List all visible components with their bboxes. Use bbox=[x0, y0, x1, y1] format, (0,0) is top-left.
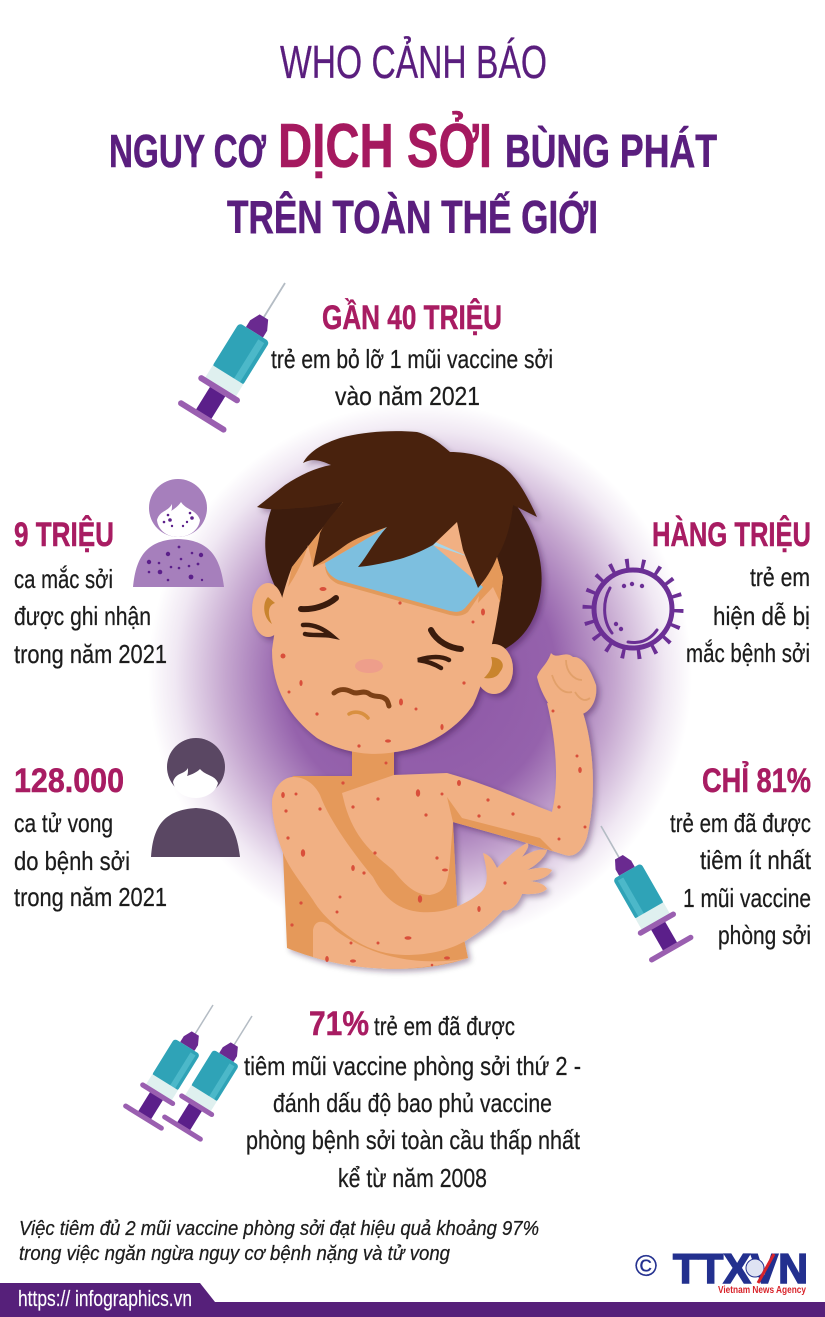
chin bbox=[349, 712, 368, 718]
stat: 128.000: trong năm 2021 bbox=[14, 882, 167, 912]
logo: TTXVN: © bbox=[635, 1250, 657, 1283]
note: Việc tiêm đủ 2 mũi vaccine phòng sởi đạt hiệu quả khoảng 97% bbox=[19, 1218, 539, 1240]
cooling patch bbox=[325, 527, 483, 616]
stat: 9 triệu: được ghi nhận bbox=[14, 601, 151, 631]
title: NGUY CƠ bbox=[109, 125, 267, 177]
stat: hàng triệu: trẻ em bbox=[750, 562, 810, 592]
stat: 71%: phòng bệnh sởi toàn cầu thấp nhất bbox=[246, 1125, 581, 1155]
nose bbox=[355, 659, 383, 673]
stat: gần 40 triệu: trẻ em bỏ lỡ 1 mũi vaccine sởi bbox=[271, 344, 553, 374]
stat: 9 triệu: trong năm 2021 bbox=[14, 639, 167, 669]
icon: syringe bottom right bbox=[161, 1004, 272, 1143]
stat: 128.000: 128.000 bbox=[14, 762, 124, 800]
stat: 71%: đánh dấu độ bao phủ vaccine bbox=[273, 1088, 552, 1118]
stat: gần 40 triệu bbox=[271, 299, 553, 411]
footer bar: https:// infographics.vn bbox=[18, 1286, 192, 1311]
stat: hàng triệu: hiện dễ bị bbox=[713, 601, 810, 631]
lower arm and hand bbox=[272, 777, 552, 955]
chest and raised arm bbox=[342, 703, 593, 895]
title: DỊCH SỞI bbox=[278, 112, 492, 181]
logo: TTXVN: TTXVN bbox=[673, 1245, 808, 1292]
mouth bbox=[334, 690, 389, 706]
icon: syringe top bbox=[177, 268, 309, 434]
illustration: sick boy bbox=[252, 431, 596, 969]
stat: 71%: kể từ năm 2008 bbox=[338, 1163, 487, 1193]
stat: hàng triệu bbox=[652, 516, 811, 668]
icon: virus bbox=[588, 564, 678, 654]
stat: chỉ 81% bbox=[670, 762, 812, 950]
stat: 9 triệu: ca mắc sởi bbox=[14, 564, 113, 594]
front hair bbox=[257, 431, 537, 588]
stat: 128.000: ca tử vong bbox=[14, 808, 113, 838]
eyebrows and eyes bbox=[301, 598, 461, 668]
purple glow background bbox=[148, 403, 692, 947]
stat: 71%: trẻ em đã được bbox=[374, 1011, 515, 1041]
stat: 71%: 71% bbox=[309, 1005, 369, 1043]
forehead shadow bbox=[288, 500, 503, 603]
footer bar bbox=[0, 1283, 825, 1317]
torso light lower panel bbox=[313, 922, 468, 969]
fist finger lines bbox=[552, 660, 590, 700]
torso bbox=[272, 750, 468, 969]
back hair bbox=[265, 497, 542, 657]
stat: chỉ 81%: tiêm ít nhất bbox=[700, 845, 812, 875]
stat: 128.000: do bệnh sởi bbox=[14, 846, 130, 876]
stat: 9 triệu: 9 TRIỆU bbox=[14, 516, 114, 554]
stat: 71% bbox=[244, 1005, 581, 1193]
title: TRÊN TOÀN THẾ GIỚI bbox=[227, 191, 598, 243]
note: trong việc ngăn ngừa nguy cơ bệnh nặng và tử vong bbox=[19, 1243, 450, 1265]
rash spots bbox=[280, 587, 586, 966]
stat: 9 triệu bbox=[14, 516, 167, 669]
icon: syringe right bbox=[579, 813, 694, 963]
face bbox=[272, 500, 503, 754]
armpit fold bbox=[447, 797, 553, 851]
icon: syringe bottom left bbox=[122, 993, 233, 1132]
stat: gần 40 triệu: vào năm 2021 bbox=[335, 381, 480, 411]
icon: child with measles rash bbox=[133, 479, 224, 587]
stat: gần 40 triệu: GẦN 40 TRIỆU bbox=[322, 299, 502, 337]
title bbox=[109, 36, 717, 243]
stat: 128.000 bbox=[14, 762, 167, 912]
title: WHO CẢNH BÁO bbox=[280, 36, 547, 88]
title: BÙNG PHÁT bbox=[505, 125, 717, 177]
icon: child silhouette bbox=[151, 738, 240, 857]
logo: TTXVN: Vietnam News Agency bbox=[718, 1285, 806, 1296]
stat: 71%: tiêm mũi vaccine phòng sởi thứ 2 - bbox=[244, 1051, 581, 1081]
ears bbox=[252, 583, 513, 694]
fist bbox=[537, 653, 596, 715]
note bbox=[19, 1218, 539, 1265]
